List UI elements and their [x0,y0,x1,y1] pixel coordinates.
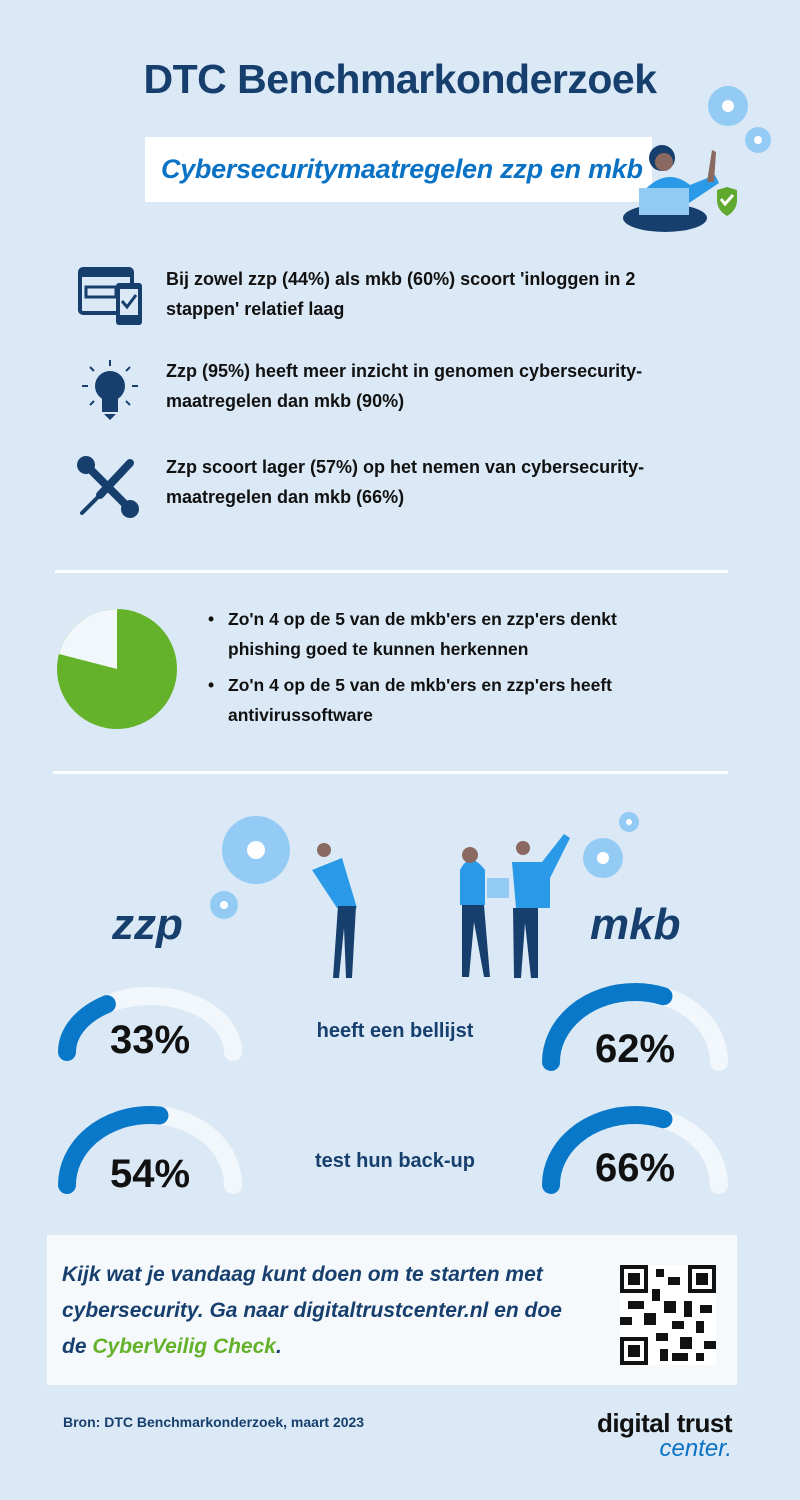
label mkb: mkb [590,900,680,949]
bullet list [208,609,617,725]
label zzp: zzp [112,900,183,949]
label: test hun back-up: test hun back-up [315,1150,475,1172]
cta text: Kijk wat je vandaag kunt doen om te starten met cybersecurity. Ga naar digitaltrustcenter.nl en doe de CyberVeilig Check. [62,1263,562,1358]
text: Bij zowel zzp (44%) als mkb (60%) scoort 'inloggen in 2 stappen' relatief laag [166,269,635,319]
illustration: woman with laptop and gears [623,86,771,232]
bullet list: • [208,609,214,629]
title: DTC Benchmarkonderzoek [143,56,656,102]
pie chart [57,609,177,729]
label: heeft een bellijst: heeft een bellijst [317,1020,473,1042]
call to action box [47,1235,737,1385]
icon: lightbulb [82,360,138,420]
icon: login screen and phone [78,267,142,325]
text: Zzp (95%) heeft meer inzicht in genomen cybersecurity-maatregelen dan mkb (90%) [166,361,642,411]
text: Zzp scoort lager (57%) op het nemen van cybersecurity-maatregelen dan mkb (66%) [166,457,644,507]
source: Bron: DTC Benchmarkonderzoek, maart 2023 [63,1414,364,1430]
logo: digital trust [597,1408,732,1438]
subtitle box [145,137,652,202]
stat 2 [82,360,642,420]
gauges: 62% [595,1027,675,1071]
icon: tools [77,456,139,518]
bullet list: • [208,675,214,695]
logo [597,1408,732,1462]
gauges: 66% [595,1146,675,1190]
QR code [620,1265,716,1365]
bullet list: Zo'n 4 op de 5 van de mkb'ers en zzp'ers heeft antivirussoftware [228,675,612,725]
stat 1 [78,267,635,325]
bullet list: Zo'n 4 op de 5 van de mkb'ers en zzp'ers denkt phishing goed te kunnen herkennen [228,609,617,659]
gauges: 54% [110,1152,190,1196]
stat 3 [77,456,644,518]
illustration: people with gears [210,812,639,978]
subtitle box: Cybersecuritymaatregelen zzp en mkb [161,154,643,184]
gauges: 33% [110,1018,190,1062]
logo: center. [660,1435,732,1462]
